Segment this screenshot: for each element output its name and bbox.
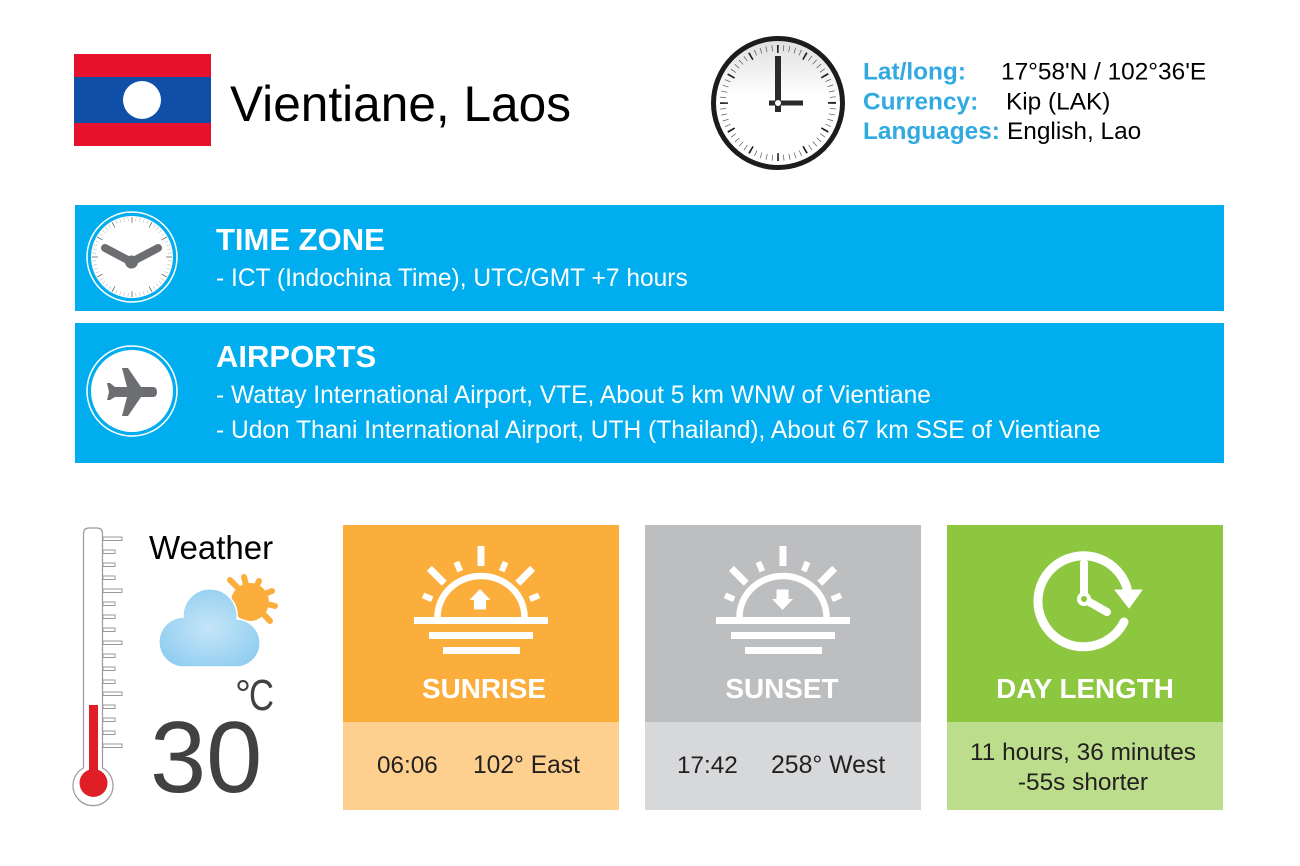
icon: time zone clock [87, 212, 177, 302]
sunrise time: 06:06 [377, 752, 438, 779]
label: sunrise: SUNRISE [422, 673, 546, 704]
label: day length: DAY LENGTH [996, 673, 1174, 704]
thermometer [73, 528, 122, 806]
heading: airports: AIRPORTS [216, 339, 376, 374]
icon: analog clock [714, 38, 842, 168]
panel: time zone [75, 205, 1224, 311]
label: sunset: SUNSET [725, 673, 839, 704]
heading: time zone: TIME ZONE [216, 222, 385, 257]
temperature unit: C [249, 671, 274, 720]
panel: sunrise [343, 525, 619, 810]
day length change: -55s shorter [1018, 769, 1148, 796]
currency row [863, 88, 1110, 116]
day length value: 11 hours, 36 minutes [970, 739, 1196, 766]
icon: airplane [87, 346, 177, 436]
weather heading: Weather [149, 529, 273, 566]
flag of Laos [74, 54, 211, 146]
lat/long row: Lat/long: [863, 58, 966, 86]
icon: clock with arrow [1038, 556, 1142, 647]
temperature unit [235, 671, 274, 720]
languages row: English, Lao [1007, 118, 1141, 145]
airport line two: - Udon Thani International Airport, UTH (Thailand), About 67 km SSE of Vientiane [216, 417, 1101, 444]
temperature unit: ° [235, 673, 251, 717]
panel: airports [75, 323, 1224, 463]
icon: sunrise [414, 546, 548, 654]
panel: sunset [645, 525, 921, 810]
panel: day length [947, 525, 1223, 810]
currency row: Kip (LAK) [1006, 88, 1110, 116]
currency row: Currency: [863, 88, 978, 116]
title: Vientiane, Laos [230, 76, 571, 132]
sunset azimuth: 258° West [771, 752, 885, 779]
sunrise azimuth: 102° East [473, 752, 580, 779]
location facts [863, 58, 1206, 145]
airport line one: - Wattay International Airport, VTE, About 5 km WNW of Vientiane [216, 382, 931, 409]
temperature value: 30 [150, 702, 262, 814]
icon: sun behind cloud [159, 577, 275, 667]
sunset time: 17:42 [677, 752, 738, 779]
time zone detail: - ICT (Indochina Time), UTC/GMT +7 hours [216, 265, 688, 292]
lat/long row [863, 58, 1206, 86]
lat/long row: 17°58'N / 102°36'E [1001, 58, 1206, 86]
languages row: Languages: [863, 118, 1000, 145]
icon: sunset [716, 546, 850, 654]
languages row [863, 118, 1141, 145]
